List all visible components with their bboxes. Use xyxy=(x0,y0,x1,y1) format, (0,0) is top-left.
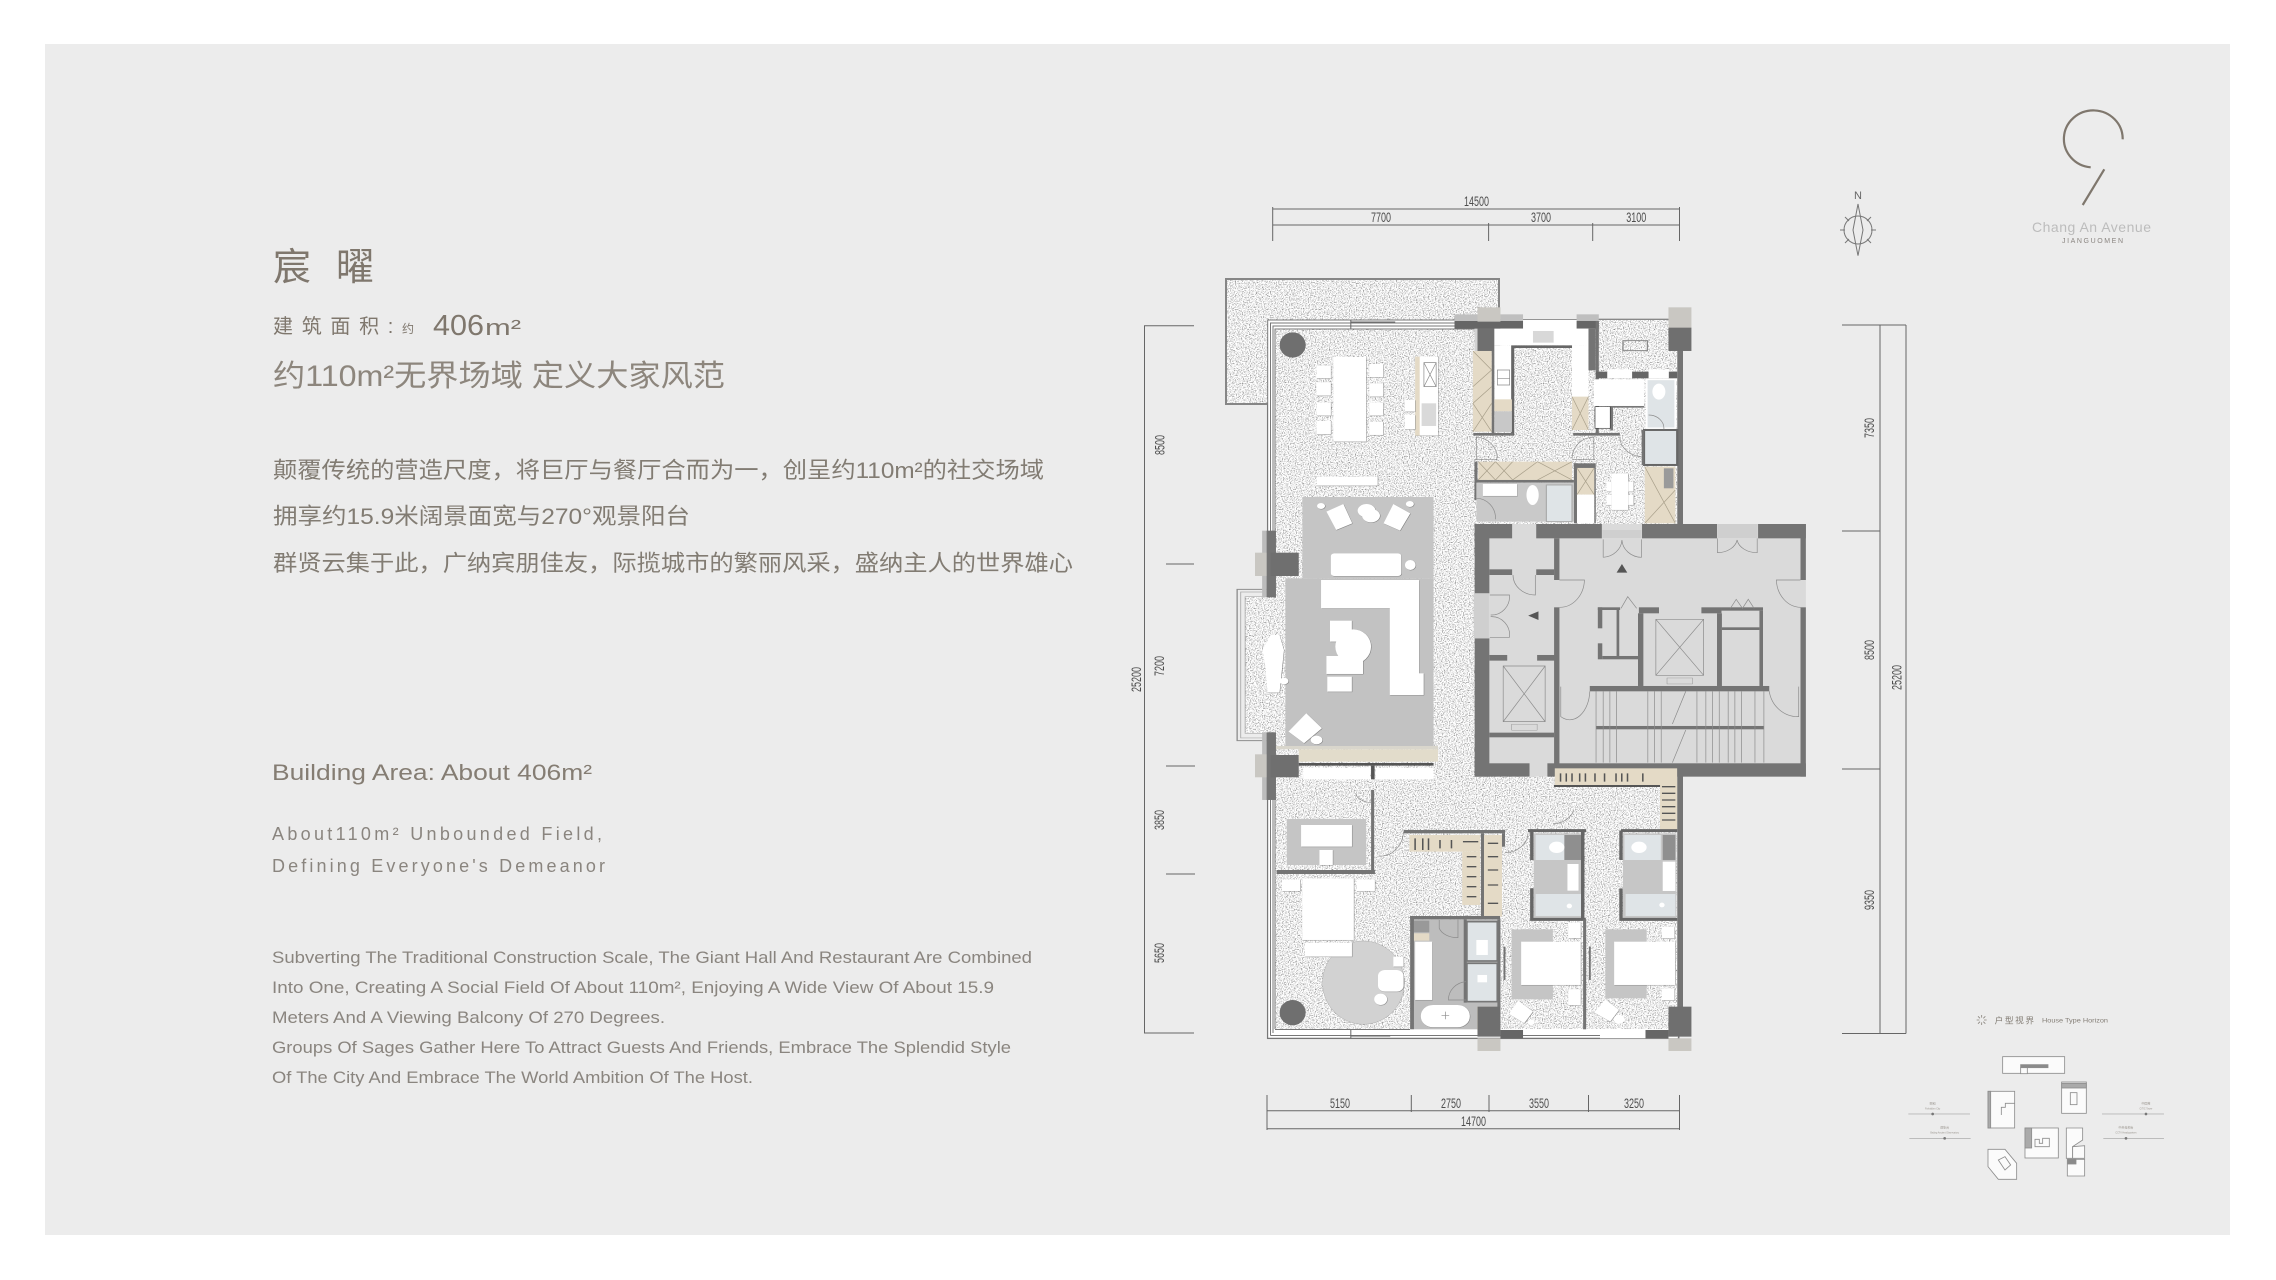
bottom dimensions xyxy=(1267,1095,1680,1130)
core: door thresholds xyxy=(1474,524,1758,638)
top dimensions xyxy=(1273,193,1680,241)
left dimensions: 5650 xyxy=(1151,943,1167,963)
utility room and bath xyxy=(1594,341,1677,523)
building area, Chinese: 建筑面积: xyxy=(273,315,402,338)
bottom dimensions: 3250 xyxy=(1624,1095,1644,1111)
bedroom 2 xyxy=(1504,922,1581,1025)
pillar xyxy=(1280,332,1306,358)
body text, English: Subverting The Traditional Construction Scale, The Giant Hall And Restaurant Are Combined xyxy=(272,948,1032,967)
kitchen island xyxy=(1405,357,1438,436)
title: 宸曜 xyxy=(273,247,399,289)
logo: Chang An Avenue 9: JIANGUOMEN xyxy=(2062,238,2123,245)
west walls and columns xyxy=(1255,531,1299,800)
powder room and storage xyxy=(1474,462,1596,523)
kitchen xyxy=(1473,321,1620,436)
left dimensions xyxy=(1128,326,1195,1033)
key plan heading xyxy=(1977,1014,2108,1025)
master bedroom xyxy=(1280,878,1404,1025)
key plan: buildings xyxy=(1988,1057,2086,1179)
bath 2 xyxy=(1528,831,1586,1029)
upper walls and columns xyxy=(1455,307,1691,526)
storage beside core xyxy=(1554,765,1683,1008)
breakfast table xyxy=(1606,473,1634,510)
doors xyxy=(1474,415,1664,519)
key plan: side labels: Forbidden City xyxy=(1925,1108,1941,1111)
subtitle, English xyxy=(272,824,605,876)
columns, south xyxy=(1351,1007,1691,1051)
key plan: side labels: 中央电视台 xyxy=(2119,1125,2133,1130)
top dimensions: 7700 xyxy=(1371,209,1391,225)
building area, Chinese: 406 xyxy=(433,310,484,342)
subtitle, English: Defining Everyone's Demeanor xyxy=(272,856,605,876)
key plan: side labels: CCTV Headquarters xyxy=(2115,1132,2137,1135)
body text, English: Meters And A Viewing Balcony Of 270 Degrees. xyxy=(272,1008,665,1027)
subtitle, English: About110m² Unbounded Field, xyxy=(272,824,602,844)
building area, Chinese: m² xyxy=(485,315,521,340)
balcony lounge chair xyxy=(1263,635,1288,693)
key plan heading: 户型视界 xyxy=(1995,1014,2034,1025)
plan: terrace and inner band lines xyxy=(1226,279,1678,1038)
bottom dimensions: 2750 xyxy=(1441,1095,1461,1111)
key plan: side labels: 颐和 xyxy=(1930,1101,1936,1106)
top dimensions: 3100 xyxy=(1626,209,1646,225)
L-shaped sofa and tables xyxy=(1288,580,1424,744)
key plan: side labels: Beijing Ancient Observatory xyxy=(1930,1132,1960,1135)
building area, Chinese xyxy=(273,310,521,342)
media cabinet xyxy=(1276,746,1438,779)
top dimensions: 14500 xyxy=(1464,193,1489,209)
body text, English: Of The City And Embrace The World Ambition Of The Host. xyxy=(272,1068,753,1087)
subtitle, Chinese: 约110m²无界场域 定义大家风范 xyxy=(273,360,725,393)
body text, English: Into One, Creating A Social Field Of About 110m², Enjoying A Wide View Of About 15.9 xyxy=(272,978,994,997)
bottom dimensions: 5150 xyxy=(1330,1095,1350,1111)
master bath xyxy=(1410,916,1500,1029)
bottom dimensions: 3550 xyxy=(1529,1095,1549,1111)
core: lifts, stairs and doors xyxy=(1490,538,1800,763)
plan: south part xyxy=(1277,765,1691,1051)
building area, Chinese: 约 xyxy=(402,321,414,336)
plan: balcony floor xyxy=(1245,597,1285,733)
left dimensions: 7200 xyxy=(1151,656,1167,676)
left dimensions: 3850 xyxy=(1151,810,1167,830)
core: walls xyxy=(1475,524,1806,777)
core: lobby floor xyxy=(1475,524,1806,777)
logo: Chang An Avenue 9 xyxy=(2032,110,2151,245)
logo: Chang An Avenue 9: Chang An Avenue xyxy=(2032,219,2151,235)
body text, English xyxy=(272,948,1032,1087)
key plan: side labels: CITIC Tower xyxy=(2140,1108,2153,1111)
bottom dimensions: 14700 xyxy=(1461,1113,1486,1129)
left dimensions: 8500 xyxy=(1152,435,1168,455)
key plan heading: House Type Horizon xyxy=(2042,1018,2108,1025)
body text, Chinese: 颠覆传统的营造尺度，将巨厅与餐厅合而为一，创呈约110m²的社交场域 xyxy=(273,458,1044,483)
right dimensions xyxy=(1842,325,1906,1034)
top dimensions: 3700 xyxy=(1531,209,1551,225)
body text, English: Groups Of Sages Gather Here To Attract Guests And Friends, Embrace The Splendid Style xyxy=(272,1038,1011,1057)
balcony xyxy=(1237,589,1267,741)
building area, English: Building Area: About 406m² xyxy=(272,760,592,785)
key plan: side labels: 中国尊 xyxy=(2141,1101,2150,1106)
left dimensions: 25200 xyxy=(1128,667,1144,692)
living room rugs xyxy=(1285,497,1434,747)
lounge furniture xyxy=(1317,477,1416,576)
key plan: house type horizon xyxy=(1908,1014,2164,1179)
plan: terrazzo floors xyxy=(1226,279,1677,1029)
bedroom 3 xyxy=(1589,927,1675,1024)
plan: outer building band xyxy=(1268,320,1679,1038)
body text, Chinese xyxy=(273,458,1073,576)
right dimensions: 8500 xyxy=(1861,640,1877,660)
key plan: side labels xyxy=(1908,1101,2164,1140)
plan: middle part xyxy=(1237,477,1806,800)
dining table and chairs xyxy=(1316,357,1383,442)
body text, Chinese: 群贤云集于此，广纳宾朋佳友，际揽城市的繁丽风采，盛纳主人的世界雄心 xyxy=(273,551,1073,576)
walk-in wardrobe xyxy=(1356,793,1574,918)
icon: north compass: N xyxy=(1854,190,1862,202)
right dimensions: 9350 xyxy=(1861,890,1877,910)
icon: north compass xyxy=(1840,190,1876,256)
plan: north part xyxy=(1280,307,1691,526)
study xyxy=(1277,790,1375,874)
bath 3 xyxy=(1621,831,1677,919)
key plan: side labels: 观象台 xyxy=(1940,1125,1949,1130)
right dimensions: 25200 xyxy=(1888,665,1904,690)
body text, Chinese: 拥享约15.9米阔景面宽与270°观景阳台 xyxy=(273,504,690,529)
floor plan xyxy=(1226,279,1806,1051)
right dimensions: 7350 xyxy=(1861,418,1877,438)
